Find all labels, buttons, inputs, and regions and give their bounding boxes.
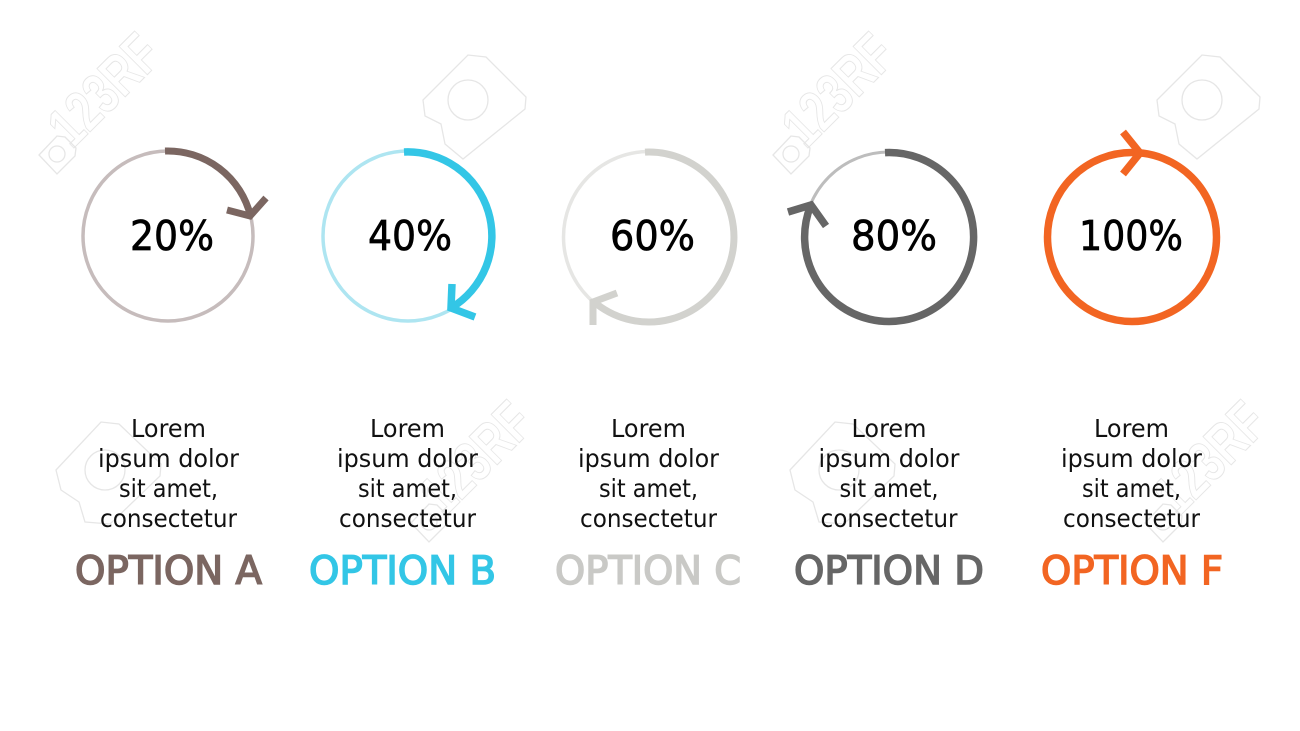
description F — [1061, 414, 1203, 533]
description B: Lorem — [370, 414, 445, 443]
description C: ipsum dolor — [578, 444, 720, 473]
value 20%: 20% — [130, 212, 214, 260]
watermark: top left logo — [35, 21, 173, 174]
ring 100% full circle with arrow — [1048, 132, 1216, 322]
description A: sit amet, — [119, 474, 218, 503]
ring 60% progress arc with arrow — [593, 152, 734, 325]
ring 40% track — [323, 151, 493, 321]
ring 20% progress arc with arrow — [165, 151, 266, 216]
watermark: camera outline 4 — [790, 422, 895, 524]
heading OPTION C: OPTION C — [555, 549, 741, 594]
panel: option B — [309, 151, 496, 594]
description F: sit amet, — [1082, 474, 1181, 503]
description D: ipsum dolor — [818, 444, 960, 473]
value 60%: 60% — [610, 212, 695, 260]
description D: Lorem — [852, 414, 926, 443]
watermark: camera outline 1 — [423, 55, 526, 159]
description B: consectetur — [339, 504, 477, 533]
value 40%: 40% — [368, 212, 452, 260]
value 100%: 100% — [1079, 212, 1183, 260]
description C — [578, 414, 720, 533]
ring 80% progress arc with arrow — [788, 153, 974, 322]
heading OPTION F: OPTION F — [1041, 549, 1223, 594]
description D: sit amet, — [840, 474, 938, 503]
description D — [818, 414, 960, 533]
panel: option C — [555, 152, 741, 594]
ring 40% progress arc with arrow — [404, 152, 492, 317]
watermark: lower right logo — [1141, 389, 1279, 542]
description B: ipsum dolor — [337, 444, 479, 473]
ring 20% track — [83, 151, 253, 321]
description F: ipsum dolor — [1061, 444, 1203, 473]
description A: consectetur — [100, 504, 238, 533]
description C: consectetur — [580, 504, 718, 533]
heading OPTION A: OPTION A — [75, 549, 262, 594]
description A — [98, 414, 240, 533]
watermark: lower centre logo — [407, 389, 545, 542]
ring 80% track — [804, 152, 974, 322]
ring 60% track — [564, 152, 734, 322]
description B — [337, 414, 479, 533]
panel: option D — [788, 152, 984, 594]
watermark: camera outline 2 — [1157, 55, 1260, 159]
description C: sit amet, — [599, 474, 698, 503]
value 80%: 80% — [851, 212, 937, 260]
heading OPTION B: OPTION B — [309, 549, 496, 594]
description F: consectetur — [1063, 504, 1201, 533]
description B: sit amet, — [358, 474, 457, 503]
description F: Lorem — [1094, 414, 1169, 443]
watermark: top right logo — [769, 21, 907, 174]
description D: consectetur — [820, 504, 958, 533]
panel: option F — [1041, 132, 1223, 594]
heading OPTION D: OPTION D — [794, 549, 984, 594]
watermark: lower centre logo: 123RF — [407, 389, 545, 527]
panel: option A — [75, 151, 266, 594]
watermark: camera outline 3 — [56, 422, 161, 524]
description A: ipsum dolor — [98, 444, 240, 473]
description A: Lorem — [131, 414, 206, 443]
description C: Lorem — [611, 414, 686, 443]
